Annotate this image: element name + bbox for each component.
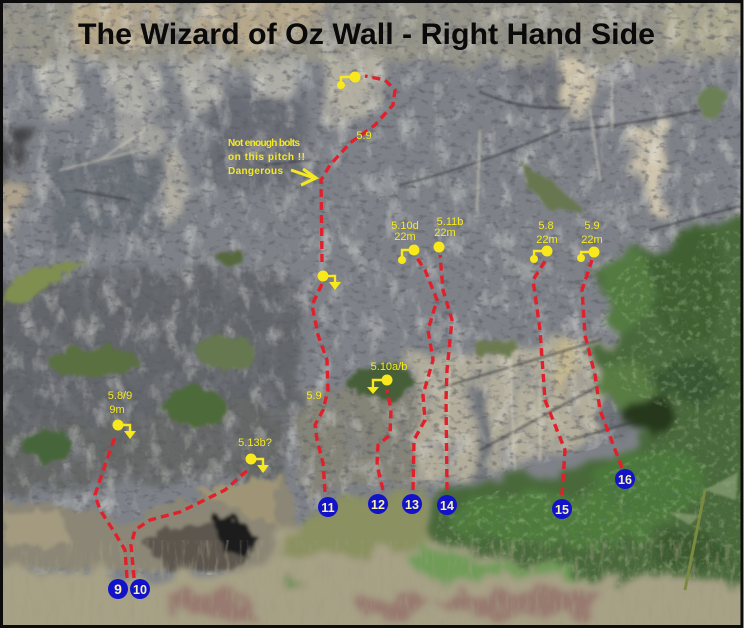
badge 11: 11: [321, 501, 335, 515]
grade labels: 22m: [536, 234, 558, 246]
lower left rock: [3, 420, 290, 500]
grade labels: 5.10d: [391, 220, 419, 232]
badge 13: [402, 494, 422, 514]
cave and lower rock band: [0, 475, 300, 572]
anchor route 9: [112, 420, 136, 439]
grade labels: 5.9: [306, 390, 322, 402]
route 13 line: [413, 258, 437, 490]
grass texture: [36, 540, 740, 620]
anchor route 16: [577, 246, 600, 262]
route 12 line: [377, 390, 391, 490]
routes: red dashed lines: [95, 76, 622, 578]
young tree: [668, 472, 738, 590]
grade labels: 5.10a/b: [371, 361, 407, 373]
route 15 line: [533, 258, 565, 495]
route 9 line: [95, 437, 127, 578]
grade labels: 5.13b?: [238, 437, 272, 449]
badge 10: 10: [133, 583, 147, 597]
badge 14: 14: [440, 499, 454, 513]
grade labels: 22m: [434, 227, 456, 239]
badge 16: 16: [618, 473, 632, 487]
anchor route 10: [246, 454, 269, 473]
bushes: upper right and lower right: [420, 218, 744, 600]
badge 16: [615, 469, 635, 489]
badge 13: 13: [405, 498, 419, 512]
badge 10: [130, 579, 150, 599]
anchor route 13: [398, 244, 420, 264]
grade labels: 5.8/9: [108, 390, 132, 402]
badge 12: 12: [371, 498, 385, 512]
dark masses: [0, 125, 25, 185]
lower wall pale section: [410, 340, 615, 480]
belay anchors: yellow dots with lower-off arrows: [112, 72, 600, 473]
warning note: on this pitch !!: [228, 152, 305, 163]
grade labels: 5.9: [584, 220, 600, 232]
warning note: Not enough bolts: [228, 138, 300, 149]
badge 9: [108, 579, 128, 599]
badge 9: 9: [114, 581, 122, 597]
route 14 line: [440, 255, 452, 490]
bushes on the wall: [3, 88, 727, 460]
grade labels: 5.9: [356, 130, 372, 142]
anchor route 11 top: [337, 72, 360, 89]
top band: [0, 0, 744, 62]
badge 11: [318, 497, 338, 517]
route 16 line: [582, 260, 622, 468]
rock tone regions: [0, 0, 744, 490]
warning note: Dangerous: [228, 166, 283, 177]
warning arrow: [291, 169, 316, 185]
badge 14: [437, 495, 457, 515]
route 11 first pitch line: [312, 284, 328, 492]
badge 15: 15: [555, 503, 569, 517]
badge 12: [368, 494, 388, 514]
anchor route 14: [434, 242, 444, 252]
grade labels: 9m: [109, 404, 125, 416]
pale patches upper left: [45, 60, 305, 120]
route 11 second pitch line: [321, 76, 395, 262]
anchor route 15: [530, 246, 552, 263]
grass foreground: [0, 488, 744, 632]
grade labels: 22m: [581, 234, 603, 246]
badge 15: [552, 499, 572, 519]
grade labels: 5.11b: [437, 216, 463, 228]
grade labels: 5.8: [538, 220, 554, 232]
right cream patches: [560, 62, 598, 125]
route 10 line: [131, 468, 250, 578]
anchor route 11 mid: [318, 270, 341, 290]
route number badges: [108, 469, 635, 599]
anchor route 12: [367, 374, 392, 394]
grade labels: 22m: [394, 231, 416, 243]
rock cracks and ledges: [60, 80, 744, 470]
grade labels: [108, 130, 603, 449]
title: The Wizard of Oz Wall - Right Hand Side: [78, 18, 655, 51]
warning note: [228, 138, 305, 177]
